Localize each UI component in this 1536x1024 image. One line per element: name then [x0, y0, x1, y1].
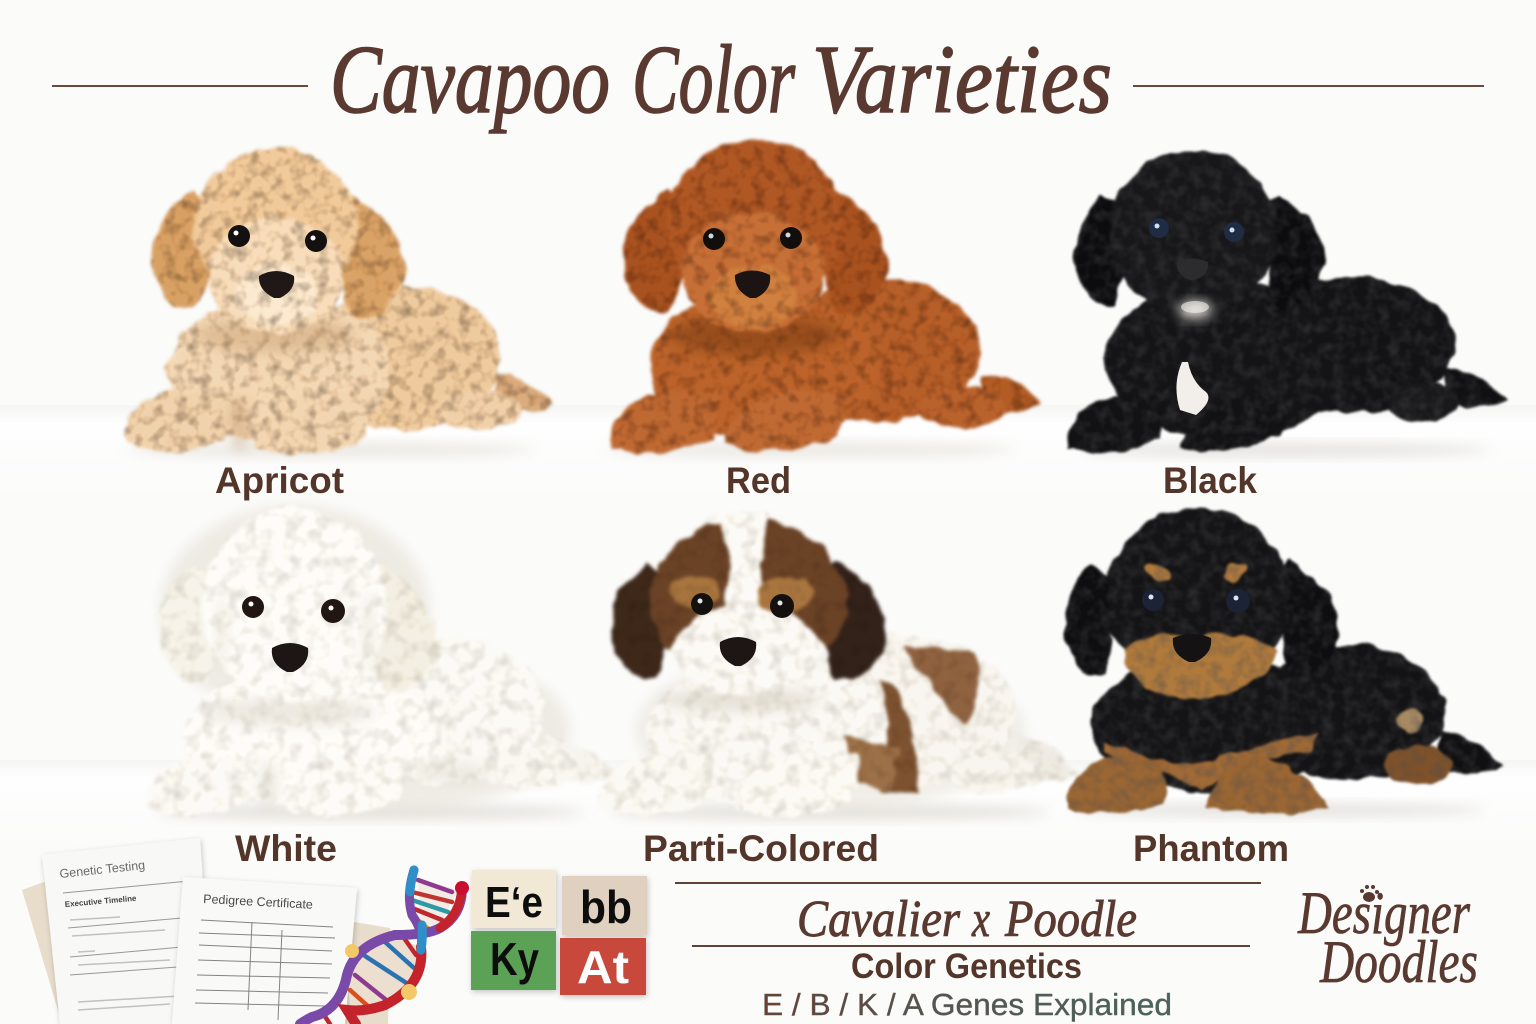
- label: Apricot: Apricot: [215, 460, 344, 501]
- documents: genetic testing and pedigree certificate: [22, 838, 390, 1024]
- text block: Cavalier x Poodle, Color Genetics: Poodle: [1004, 891, 1137, 948]
- text block: Cavalier x Poodle, Color Genetics: x: [971, 891, 990, 948]
- document: genetic testing: Executive Timeline: [64, 894, 137, 909]
- document: pedigree certificate: [172, 877, 357, 1024]
- logo: Designer Doodles: Designer: [1297, 880, 1471, 946]
- document: pedigree certificate: Pedigree Certificate: [203, 892, 313, 912]
- title: Cavapoo Color Varieties: Color: [632, 26, 796, 134]
- document: genetic testing: Genetic Testing: [59, 858, 146, 881]
- tile: Ee: E‘e: [485, 878, 543, 927]
- puppy: phantom: [1064, 508, 1503, 817]
- puppy: red: [605, 140, 1042, 458]
- tile: Ky: Ky: [490, 933, 539, 985]
- tile: bb: bb: [580, 881, 632, 933]
- tile: Ee: [472, 870, 556, 928]
- logo: Designer Doodles: [1297, 880, 1478, 995]
- icon: DNA helix: [300, 870, 469, 1024]
- title: Cavapoo Color Varieties: Cavapoo: [330, 26, 610, 134]
- logo: Designer Doodles: Doodles: [1319, 929, 1478, 995]
- text block: Cavalier x Poodle, Color Genetics: Color Genetics: [851, 947, 1082, 986]
- tiles: gene letter blocks: [471, 870, 647, 995]
- label: White: White: [235, 828, 337, 869]
- text block: Cavalier x Poodle, Color Genetics: [675, 883, 1261, 1022]
- title: Cavapoo Color Varieties: Varieties: [812, 26, 1112, 134]
- tile: At: [560, 938, 646, 995]
- puppy: apricot: [125, 148, 552, 458]
- puppy: black: [1068, 150, 1507, 457]
- tile: Ky: [471, 931, 556, 990]
- label: Red: Red: [726, 460, 791, 501]
- text block: Cavalier x Poodle, Color Genetics: Cavalier: [797, 891, 961, 948]
- label: Black: Black: [1163, 460, 1257, 501]
- tile: bb: [562, 876, 647, 935]
- label: Parti-Colored: Parti-Colored: [643, 828, 879, 869]
- tile: At: At: [577, 941, 629, 993]
- text block: Cavalier x Poodle, Color Genetics: E / B / K / A Genes Explained: [762, 987, 1172, 1022]
- puppy: white: [145, 505, 618, 820]
- icon: paw print: [1360, 885, 1379, 902]
- label: Phantom: Phantom: [1133, 828, 1289, 869]
- document: genetic testing: [42, 838, 212, 1024]
- puppy: parti-colored: [598, 511, 1080, 820]
- title: Cavapoo Color Varieties: [52, 26, 1484, 134]
